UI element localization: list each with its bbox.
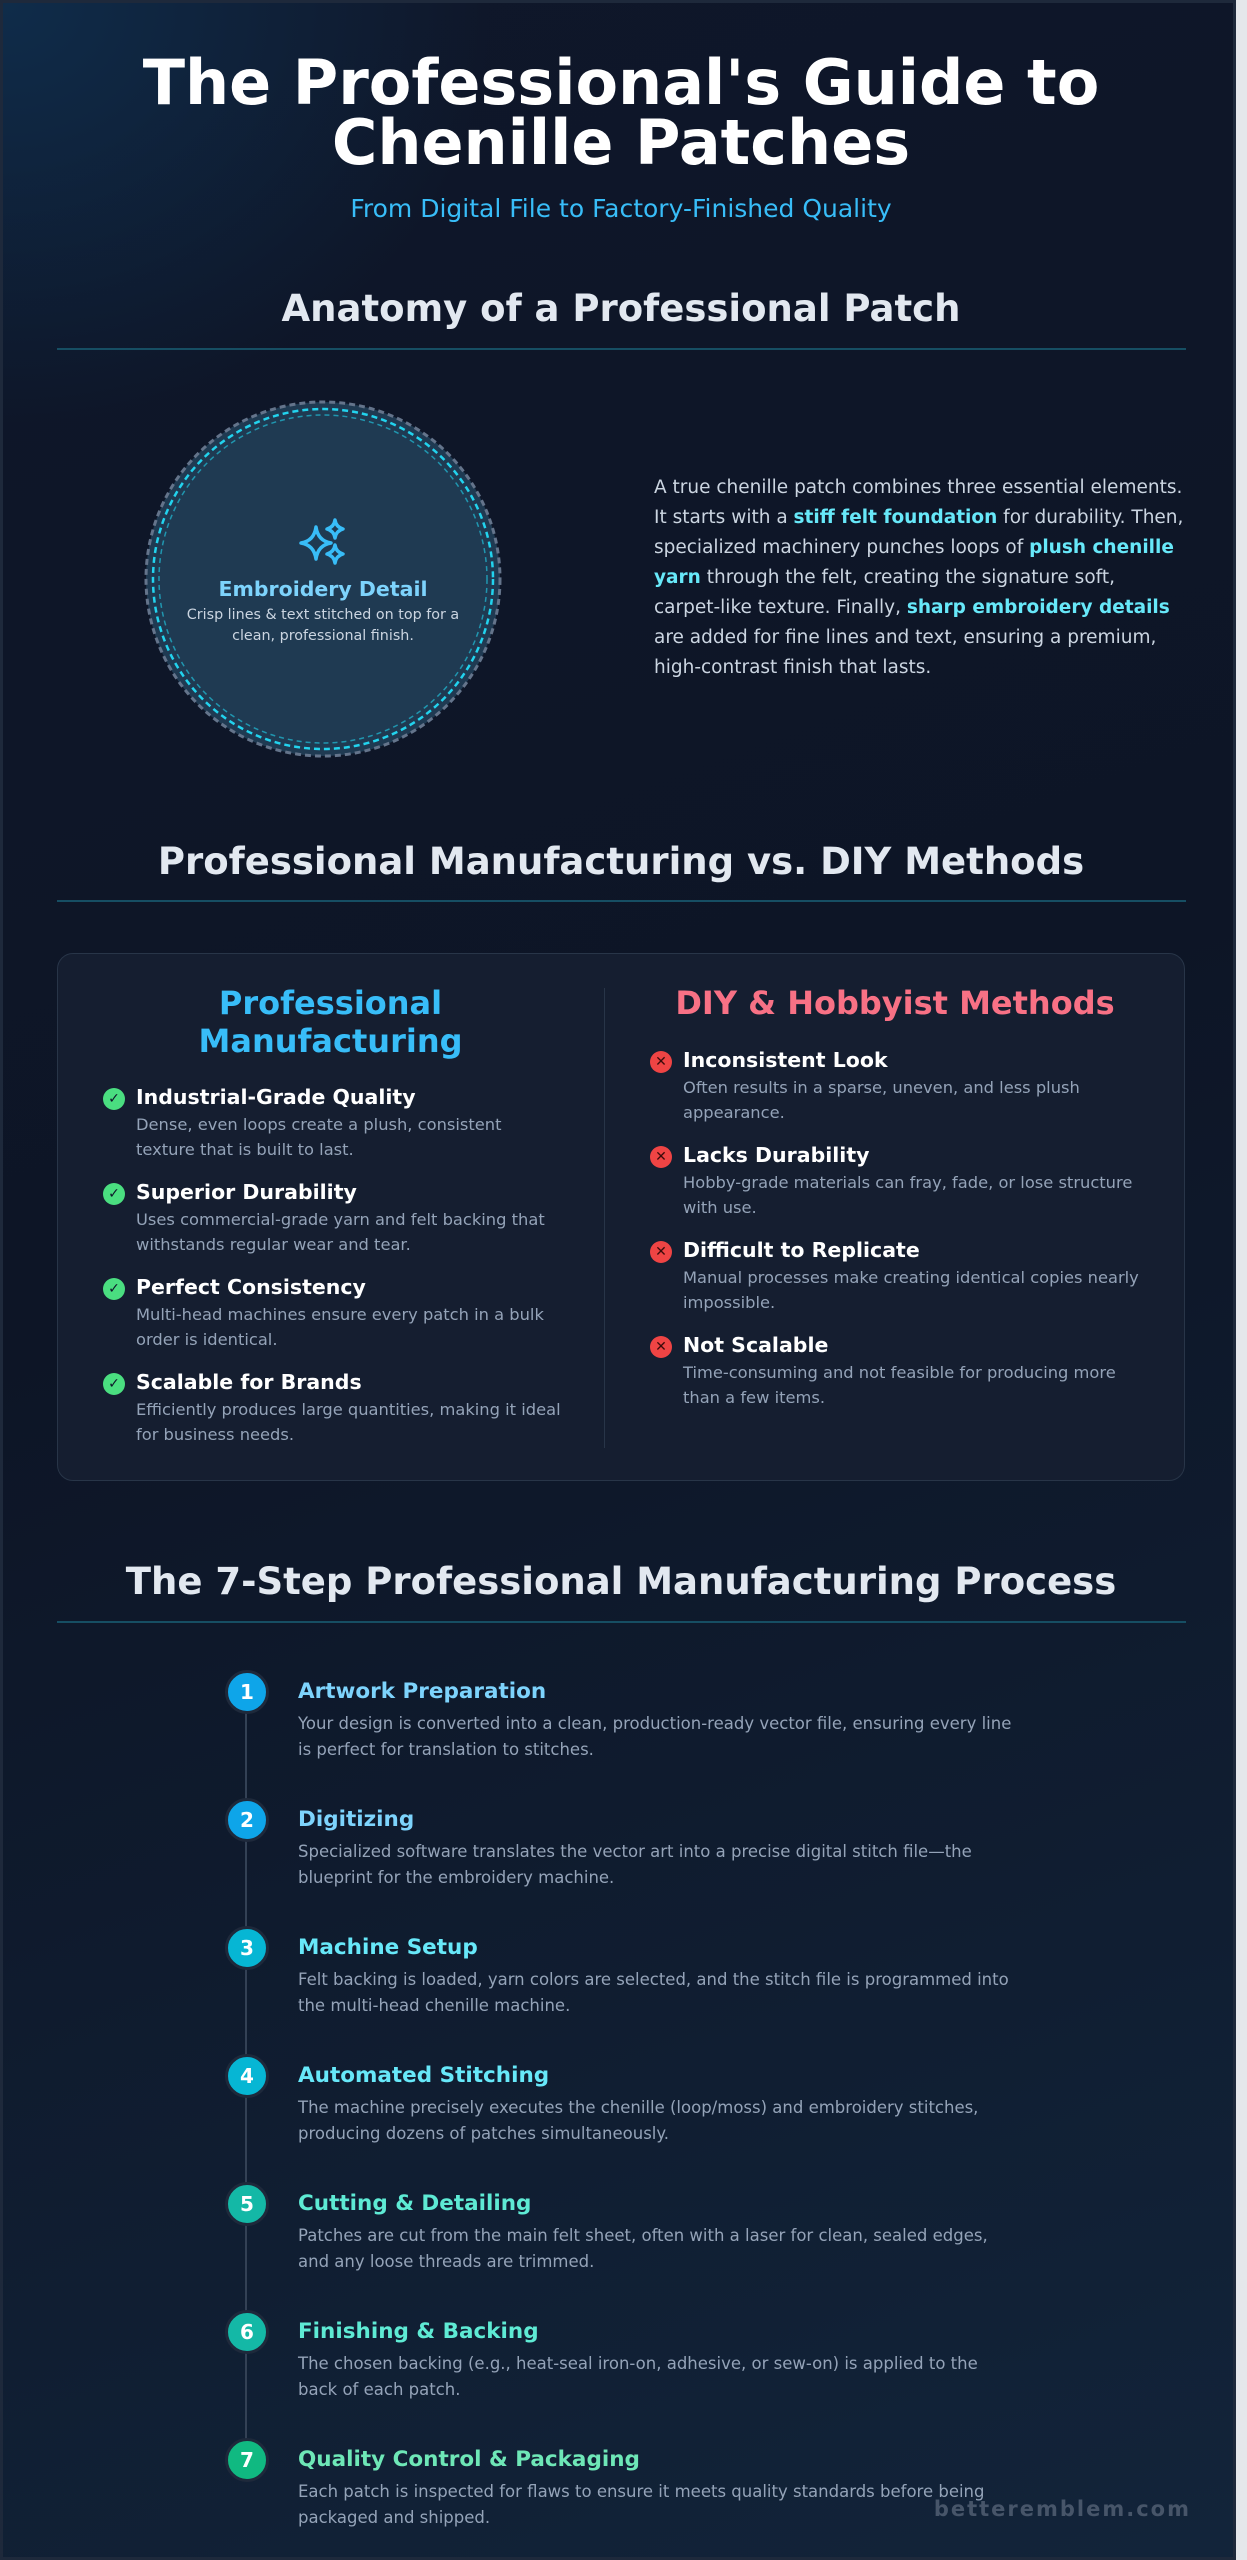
timeline steps: packaged and shipped. xyxy=(298,2508,490,2527)
list: professional xyxy=(103,1085,561,1444)
list: DIY: than a few items. xyxy=(683,1388,825,1406)
timeline steps: the multi-head chenille machine. xyxy=(298,1996,570,2015)
list: DIY: impossible. xyxy=(683,1292,775,1312)
list: DIY: Time-consuming and not feasible for producing more xyxy=(683,1363,1116,1382)
heading: process: The 7-Step Professional Manufacturing Process xyxy=(126,1560,1116,1603)
timeline steps: 7 xyxy=(240,2448,254,2472)
panel: comparison: ✓ xyxy=(108,1281,120,1297)
text: anatomy description: A true chenille patch combines three essential elements. xyxy=(654,477,1182,498)
list: DIY: Hobby-grade materials can fray, fade, or lose structure xyxy=(683,1173,1132,1192)
text: anatomy description: It starts with a stiff felt foundation for durability. Then, xyxy=(654,507,1183,528)
heading: professional: Professional xyxy=(219,984,442,1022)
list: professional: withstands regular wear and tear. xyxy=(136,1234,411,1254)
timeline steps: Patches are cut from the main felt sheet, often with a laser for clean, sealed edges, xyxy=(298,2226,988,2245)
panel: comparison: ✓ xyxy=(108,1376,120,1392)
heading: DIY: DIY & Hobbyist Methods xyxy=(675,984,1115,1022)
label: Embroidery Detail xyxy=(218,577,428,601)
timeline steps: 6 xyxy=(240,2320,254,2344)
timeline steps: Machine Setup xyxy=(298,1935,478,1960)
timeline steps: The machine precisely executes the chenille (loop/moss) and embroidery stitches, xyxy=(298,2098,978,2117)
subtitle: From Digital File to Factory-Finished Quality xyxy=(350,194,892,223)
list: professional: Perfect Consistency xyxy=(136,1275,366,1299)
footer: watermark: betteremblem.com xyxy=(934,2497,1191,2521)
timeline steps: 5 xyxy=(240,2192,254,2216)
timeline steps: Felt backing is loaded, yarn colors are selected, and the stitch file is programmed into xyxy=(298,1970,1009,1989)
timeline steps: The chosen backing (e.g., heat-seal iron-on, adhesive, or sew-on) is applied to the xyxy=(298,2354,978,2373)
text: anatomy description: high-contrast finish that lasts. xyxy=(654,657,931,678)
panel: comparison: ✕ xyxy=(655,1054,667,1070)
list: professional: for business needs. xyxy=(136,1424,294,1444)
list: professional: Efficiently produces large quantities, making it ideal xyxy=(136,1400,561,1419)
timeline steps: Each patch is inspected for flaws to ensure it meets quality standards before being xyxy=(298,2482,984,2501)
heading: comparison: Professional Manufacturing vs. DIY Methods xyxy=(158,840,1084,883)
timeline steps: 3 xyxy=(240,1936,254,1960)
timeline steps: 2 xyxy=(240,1808,254,1832)
list: DIY: Not Scalable xyxy=(683,1333,828,1357)
timeline steps: Finishing & Backing xyxy=(298,2319,539,2344)
panel: comparison: ✓ xyxy=(108,1186,120,1202)
patch illustration: clean, professional finish. xyxy=(232,628,414,644)
list: professional: order is identical. xyxy=(136,1330,278,1348)
timeline steps: Automated Stitching xyxy=(298,2063,549,2088)
list: DIY: appearance. xyxy=(683,1102,785,1122)
text: anatomy description: yarn through the felt, creating the signature soft, xyxy=(654,567,1115,588)
timeline steps: is perfect for translation to stitches. xyxy=(298,1740,594,1759)
heading: anatomy: Anatomy of a Professional Patch xyxy=(282,287,960,330)
list: professional: Dense, even loops create a plush, consistent xyxy=(136,1115,502,1134)
list: DIY: Manual processes make creating identical copies nearly xyxy=(683,1268,1139,1287)
timeline steps: Specialized software translates the vector art into a precise digital stitch file—the xyxy=(298,1842,972,1861)
icon: sparkles xyxy=(301,520,343,563)
list: professional: Industrial-Grade Quality xyxy=(136,1085,416,1109)
timeline steps: Digitizing xyxy=(298,1807,414,1832)
panel: comparison: ✓ xyxy=(108,1091,120,1107)
timeline steps: 4 xyxy=(240,2064,254,2088)
timeline steps: 1 xyxy=(240,1680,254,1704)
list: professional: Superior Durability xyxy=(136,1180,357,1204)
timeline steps: back of each patch. xyxy=(298,2380,460,2399)
timeline steps xyxy=(225,1670,1011,2527)
text: anatomy description xyxy=(654,477,1183,678)
timeline steps: Artwork Preparation xyxy=(298,1679,546,1704)
title: The Professional's Guide to xyxy=(143,46,1099,119)
list: DIY: Difficult to Replicate xyxy=(683,1238,920,1262)
list: DIY: Inconsistent Look xyxy=(683,1048,888,1072)
list: DIY: Often results in a sparse, uneven, and less plush xyxy=(683,1078,1080,1097)
text: anatomy description: carpet-like texture. Finally, sharp embroidery details xyxy=(654,597,1170,618)
heading: professional: Manufacturing xyxy=(198,1022,462,1060)
text: anatomy description: are added for fine lines and text, ensuring a premium, xyxy=(654,627,1156,648)
list: DIY: with use. xyxy=(683,1198,757,1216)
panel: comparison: ✕ xyxy=(655,1244,667,1260)
timeline steps: and any loose threads are trimmed. xyxy=(298,2252,594,2271)
list: DIY xyxy=(650,1048,1139,1406)
panel: comparison: ✕ xyxy=(655,1149,667,1165)
list: professional: Scalable for Brands xyxy=(136,1370,362,1394)
text: anatomy description: specialized machinery punches loops of plush chenille xyxy=(654,537,1174,558)
timeline steps: Cutting & Detailing xyxy=(298,2191,531,2216)
timeline steps: Your design is converted into a clean, production-ready vector file, ensuring every line xyxy=(298,1714,1011,1733)
list: professional: Uses commercial-grade yarn and felt backing that xyxy=(136,1210,545,1229)
patch illustration: Crisp lines & text stitched on top for a xyxy=(187,607,459,623)
heading: professional xyxy=(198,984,462,1060)
list: professional: texture that is built to last. xyxy=(136,1140,354,1158)
panel: comparison xyxy=(57,953,1185,1481)
patch illustration xyxy=(144,400,502,758)
timeline steps: Quality Control & Packaging xyxy=(298,2447,640,2472)
panel: comparison: ✕ xyxy=(655,1339,667,1355)
list: DIY: Lacks Durability xyxy=(683,1143,870,1167)
title: Chenille Patches xyxy=(332,106,910,179)
timeline line xyxy=(245,1693,247,2461)
timeline steps: blueprint for the embroidery machine. xyxy=(298,1868,614,1887)
list: professional: Multi-head machines ensure every patch in a bulk xyxy=(136,1305,544,1324)
title xyxy=(143,46,1099,179)
timeline steps: producing dozens of patches simultaneously. xyxy=(298,2124,669,2143)
